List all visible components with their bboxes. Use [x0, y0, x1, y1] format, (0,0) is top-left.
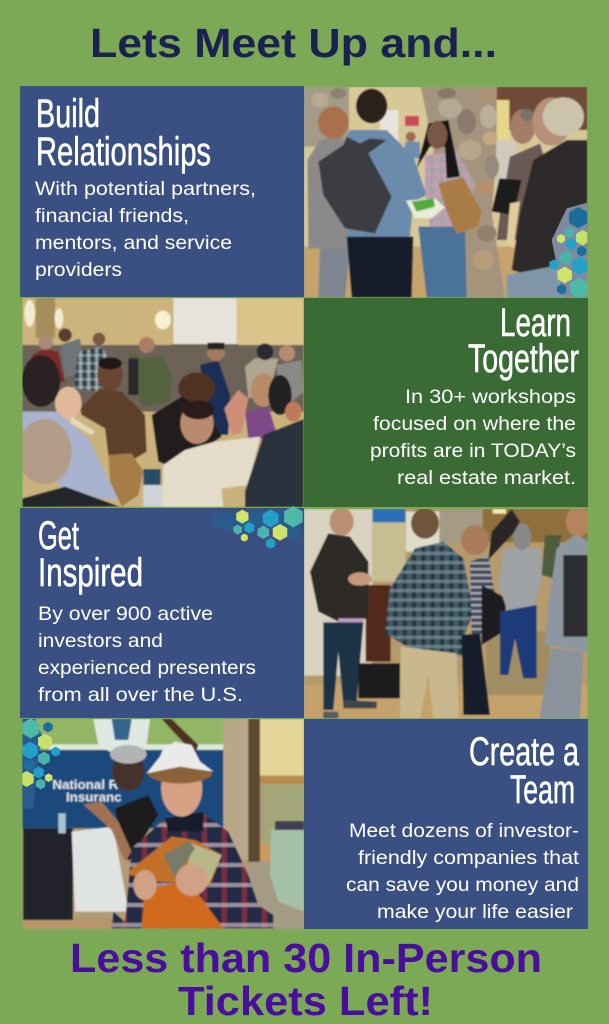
photo: crowded ballroom: [17, 298, 304, 507]
heading: build relationships: [36, 92, 211, 174]
text: create a team description: Meet dozens of investor-: [349, 820, 579, 842]
table with white cloth: [23, 813, 128, 920]
backdrop logo text: Insuranc: [66, 790, 122, 805]
person: man with glasses and binder: [492, 109, 545, 240]
text: create a team description: friendly companies that: [358, 847, 580, 869]
decoration: hexagon cluster: [549, 203, 589, 299]
text: get inspired description: [38, 603, 256, 706]
heading: create a team: [469, 730, 580, 812]
text: build relationships description: providers: [35, 259, 122, 281]
table with green cloth: [270, 821, 304, 912]
text: get inspired description: from all over the U.S.: [38, 684, 243, 706]
person: man in grey hoodie and beanie: [488, 509, 543, 678]
heading: get inspired: Get: [38, 514, 79, 558]
person: man in dark sweater: [310, 508, 377, 718]
luggage: [358, 663, 400, 698]
heading: build relationships: Relationships: [36, 130, 211, 174]
person: woman in polka dot shirt: [245, 373, 292, 438]
text: learn together description: In 30+ workshops: [405, 386, 576, 408]
panel: get inspired: [20, 506, 304, 718]
text: create a team description: [346, 820, 580, 923]
decoration: hexagon cluster: [213, 506, 303, 549]
person: boy and man on the left: [22, 355, 118, 500]
closing call to action: Less than 30 In-Person: [70, 935, 542, 981]
text: learn together description: profits are in TODAY’s: [370, 440, 576, 462]
person: bald man in grey suit: [307, 107, 350, 297]
decoration: hexagon cluster: [20, 718, 60, 808]
person: dark curly-haired woman: [152, 372, 222, 468]
photo: exhibitor conversation in lobby: [304, 507, 591, 718]
text: learn together description: focused on where the: [373, 413, 576, 435]
person: man in grey suit with backpack: [539, 507, 591, 718]
closing call to action: [70, 935, 542, 1024]
panel: learn together: [304, 298, 588, 507]
crowd in background: [32, 328, 304, 435]
person: bald man in foreground: [17, 419, 120, 507]
heading: learn together: Learn: [500, 301, 571, 345]
text: learn together description: [370, 386, 576, 489]
photo: smiling woman in hard hat with gift cards: [20, 718, 304, 929]
person: woman in hard hat: [112, 742, 273, 928]
person: man in green jacket: [542, 535, 562, 578]
person: older man in dark jacket: [507, 97, 587, 297]
text: build relationships description: [35, 178, 256, 281]
person: woman in brown shirt: [80, 357, 147, 507]
person: woman making peace sign: [83, 719, 198, 862]
person: man in plaid shirt: [385, 508, 473, 718]
heading: learn together: [468, 301, 579, 381]
text: get inspired description: By over 900 active: [38, 603, 213, 625]
heading: create a team: Team: [510, 768, 575, 812]
backdrop logo text: [52, 777, 122, 805]
person: woman with plaid shirt and jacket: [406, 120, 482, 297]
backdrop logo text: National R: [52, 777, 119, 792]
text: build relationships description: mentors, and service: [35, 232, 232, 254]
text: build relationships description: financial friends,: [35, 205, 189, 227]
person: young man in striped shirt: [461, 525, 507, 715]
text: build relationships description: With potential partners,: [35, 178, 256, 200]
text: learn together description: real estate market.: [397, 467, 576, 489]
person: smiling woman waving with cup: [143, 390, 260, 507]
closing call to action: Tickets Left!: [178, 978, 433, 1024]
gift cards: [128, 837, 223, 928]
heading: build relationships: Build: [36, 92, 100, 136]
heading: get inspired: Inspired: [38, 551, 143, 595]
panel: build relationships: [20, 86, 304, 297]
text: create a team description: can save you money and: [346, 874, 579, 896]
title: Lets Meet Up and...: [90, 20, 497, 66]
text: create a team description: make your life easier: [377, 901, 574, 923]
person: man with backpack: [318, 89, 427, 297]
photo: attendees talking by stone pillar: [304, 87, 589, 299]
heading: get inspired: [38, 514, 143, 595]
panel: create a team: [304, 719, 588, 929]
text: get inspired description: investors and: [38, 630, 163, 652]
person: man in dark jacket, right foreground: [245, 402, 304, 507]
text: get inspired description: experienced presenters: [38, 657, 256, 679]
